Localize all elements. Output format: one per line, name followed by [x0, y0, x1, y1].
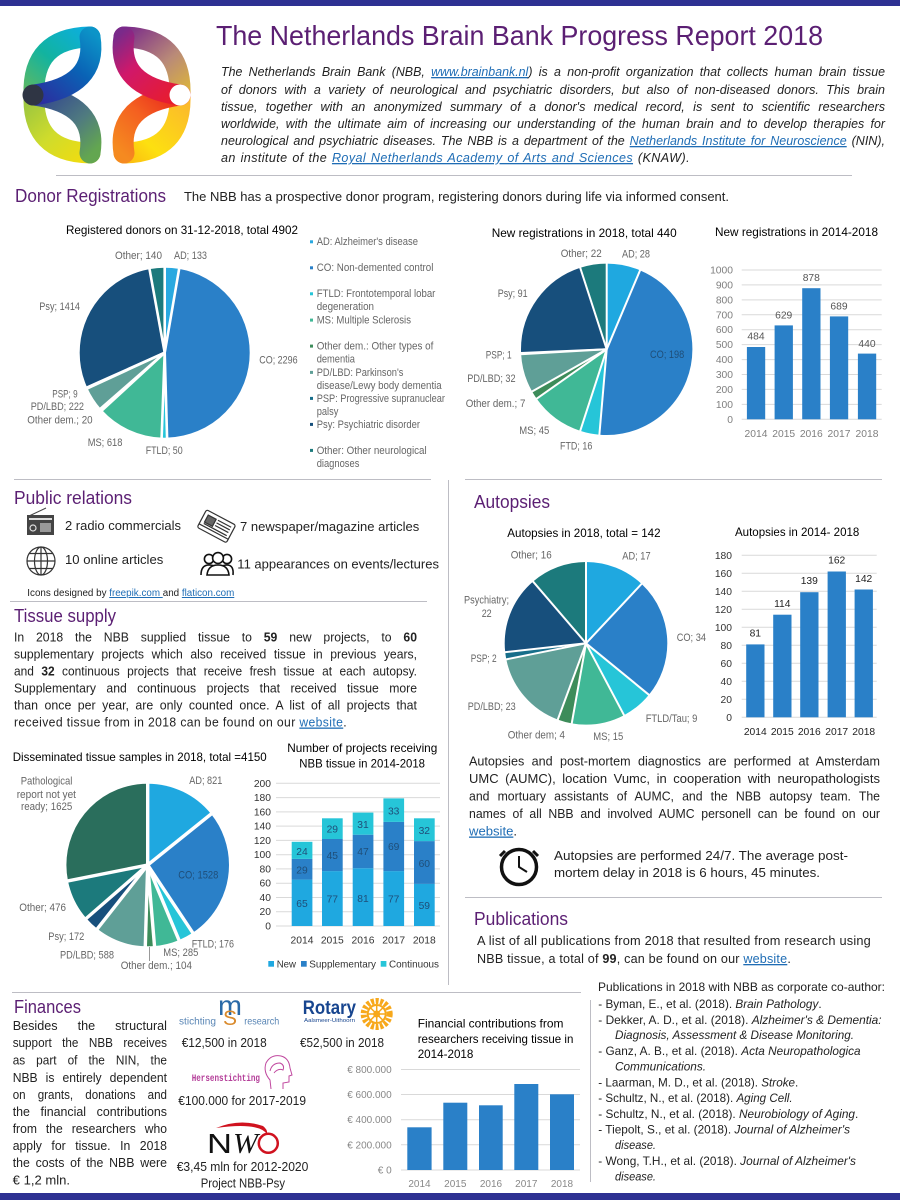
panel: corporate co-author publications list: Publications in 2018 with NBB as corporate co-author: [598, 980, 885, 994]
pie data labels: PSP; 9 [52, 388, 78, 400]
finances paragraph: the financial contributions [13, 1104, 167, 1119]
panel: new registrations bar chart [710, 225, 882, 440]
panel: corporate co-author publications list: Diagnosis, Assessment & Disease Monitoring. [615, 1028, 854, 1042]
icon: people [201, 553, 233, 575]
pie data labels [466, 248, 684, 452]
legend: diagnosis abbreviations: FTLD: Frontotemporal lobar [317, 288, 436, 300]
tissue supply paragraph: In 2018 the NBB supplied tissue to 59 new projects, to 60 [14, 630, 417, 644]
logo: Hersenstichting: Hersenstichting [192, 1073, 260, 1085]
pie data labels: Other dem.; 20 [27, 414, 93, 426]
pie data labels: Other dem.; 7 [466, 398, 525, 410]
panel: corporate co-author publications list [598, 980, 885, 1184]
bar value labels: 484 [747, 332, 765, 342]
bar value labels [747, 273, 876, 350]
tissue supply paragraph: and 32 continuous projects that receive fresh tissue at each autopsy. [14, 664, 417, 678]
pie data labels: AD; 821 [189, 775, 222, 787]
funding: Rotary: €52,500 in 2018 [300, 1036, 384, 1050]
pie chart [122, 310, 207, 395]
bar value labels: 31 [357, 820, 369, 831]
pie chart [107, 824, 188, 906]
y axis labels: € 200.000 [347, 1140, 392, 1151]
bars [746, 572, 873, 717]
bar value labels [296, 806, 430, 912]
chart title: Autopsies in 2014- 2018 [735, 525, 860, 539]
pie data labels: PD/LBD; 222 [31, 401, 84, 413]
chart title [418, 1016, 573, 1061]
x axis labels: 2017 [515, 1179, 538, 1190]
bar value labels: 142 [855, 574, 873, 585]
y axis labels: 60 [260, 879, 271, 890]
x axis labels: 2017 [828, 429, 851, 440]
tissue supply paragraph: Supplementary and continuous projects that received tissue more [14, 680, 417, 696]
funding: NWO: €3,45 mln for 2012-2020 [177, 1160, 308, 1174]
legend: diagnosis abbreviations: dementia [317, 354, 356, 366]
autopsies paragraph: UMC (AUMC), location Vumc, in cooperation with neuropathologists [469, 771, 880, 786]
icon: clock [500, 850, 538, 884]
pie data labels: PD/LBD; 23 [468, 701, 516, 713]
pie data labels: Psy; 172 [48, 931, 84, 943]
bottom bar [0, 1193, 900, 1200]
autopsy delay note [554, 848, 848, 880]
logo: Rotary: Rotary [303, 998, 356, 1019]
y axis labels: 180 [254, 793, 271, 804]
bar value labels: 81 [357, 894, 369, 905]
y axis labels: 20 [260, 907, 271, 918]
bar value labels: 29 [296, 866, 308, 876]
pie data labels: AD; 28 [622, 248, 650, 260]
panel: publications [474, 909, 871, 966]
pie data labels: FTLD; 176 [192, 938, 234, 950]
finances paragraph: support the NBB receives [13, 1035, 167, 1050]
pie data labels: MS; 285 [163, 947, 198, 959]
pie data labels: Other; 22 [561, 248, 602, 260]
x axis labels: 2015 [444, 1179, 467, 1190]
top bar [0, 0, 900, 6]
x axis labels [291, 936, 436, 946]
y axis labels [347, 1065, 392, 1176]
pie data labels: Pathological [21, 776, 72, 788]
pie data labels: Other dem; 4 [508, 730, 565, 742]
legend: diagnosis abbreviations: PD/LBD: Parkinson's [317, 367, 404, 379]
donor program sentence: The NBB has a prospective donor program, registering donors during life via informed consent. [184, 189, 729, 204]
chart legend: New [277, 960, 297, 971]
autopsies paragraph [468, 754, 881, 838]
intro text: worldwide, with the ultimate aim of increasing our understanding of the human brain and to develop therapies for [221, 116, 886, 131]
panel: corporate co-author publications list: - Ganz, A. B., et al. (2018). Acta Neuropathologica [598, 1044, 861, 1058]
y axis labels: 180 [715, 551, 732, 562]
chart title [287, 741, 437, 770]
tissue supply paragraph: received tissue from in 2018 can be found on our website. [14, 714, 347, 730]
bars [747, 288, 876, 419]
x axis labels: 2016 [480, 1179, 503, 1190]
x axis labels: 2018 [852, 727, 875, 738]
x axis labels: 2014 [291, 936, 314, 946]
intro text: tissue, together with an anonymized summary of a donor's medical record, is sent to scientific researchers [221, 99, 885, 114]
autopsy delay note: Autopsies are performed 24/7. The average post- [554, 848, 848, 863]
pie data labels [17, 775, 234, 972]
pie data labels: report not yet [17, 789, 76, 801]
bar value labels: 114 [774, 599, 791, 610]
y axis labels [254, 779, 271, 932]
tissue supply paragraph: supplementary projects which also received tissue in previous years, [14, 646, 417, 662]
y axis labels: 80 [721, 641, 732, 652]
bar value labels: 45 [327, 851, 338, 862]
pie chart [545, 603, 627, 684]
pie data labels: PSP; 1 [486, 350, 512, 362]
panel: corporate co-author publications list: - Byman, E., et al. (2018). Brain Pathology. [598, 997, 822, 1011]
autopsies paragraph: and mortuary assistants of AUMC, and the NBB autopsy team. The [469, 788, 880, 804]
bar value labels: 77 [388, 894, 400, 906]
y axis labels: 200 [716, 385, 733, 396]
publications text [477, 933, 871, 966]
panel: corporate co-author publications list: - Laarman, M. D., et al. (2018). Stroke. [598, 1075, 798, 1089]
pie data labels: CO; 2296 [259, 354, 298, 366]
intro text: of donors with a variety of neurological and psychiatric disorders, but also of non-diseased donors. This brain [221, 82, 885, 97]
y axis labels: 200 [254, 779, 271, 790]
chart legend: Supplementary [309, 960, 377, 971]
x axis labels: 2014 [408, 1179, 431, 1190]
x axis labels: 2014 [744, 727, 767, 738]
pie chart [564, 306, 650, 392]
y axis labels: 100 [254, 850, 271, 861]
finances paragraph: Besides the structural [13, 1018, 167, 1033]
y axis labels: 0 [727, 415, 733, 426]
y axis labels: 900 [716, 280, 733, 291]
autopsies paragraph: Autopsies and post-mortem diagnostics are performed at Amsterdam [469, 754, 880, 768]
legend: diagnosis abbreviations: AD: Alzheimer's disease [317, 236, 418, 248]
chart title: Financial contributions from [418, 1016, 563, 1030]
intro text: neurological and psychiatric diseases. The NBB is a department of the Netherlands Institute for Neuroscience (NIN), [221, 133, 885, 148]
chart title: Number of projects receiving [287, 741, 437, 755]
y axis labels: 800 [716, 295, 733, 306]
pie data labels: CO; 198 [650, 349, 684, 361]
bar value labels: 33 [388, 806, 400, 818]
autopsies paragraph: website. [468, 824, 517, 838]
y axis labels: 40 [260, 893, 271, 904]
x axis labels: 2018 [856, 429, 879, 440]
y axis labels: 1000 [710, 266, 733, 276]
pie data labels: PSP; 2 [471, 653, 497, 665]
pie data labels: Psy; 1414 [39, 301, 80, 313]
x axis labels: 2015 [772, 429, 795, 440]
finances paragraph: on grants, donations and [13, 1087, 167, 1102]
chart legend: Continuous [389, 960, 439, 971]
logo: stichting MS research: stichting [179, 1016, 216, 1028]
chart title: Disseminated tissue samples in 2018, total =4150 [13, 750, 267, 764]
y axis labels: 20 [721, 695, 732, 706]
logo: Rotary: Aalsmeer-Uithoorn [304, 1018, 355, 1024]
bar value labels: 65 [296, 899, 308, 910]
y axis labels: € 600.000 [347, 1090, 392, 1101]
pie data labels: Other dem.; 104 [121, 960, 192, 972]
y axis labels: 160 [715, 569, 732, 580]
pie data labels [27, 250, 298, 457]
bars [407, 1084, 574, 1170]
bar value labels: 162 [828, 556, 846, 566]
pie data labels: Other; 16 [511, 550, 552, 562]
legend: diagnosis abbreviations: diagnoses [317, 458, 360, 470]
x axis labels: 2015 [321, 936, 344, 946]
pie data labels: MS; 45 [519, 425, 549, 437]
newspaper text: 7 newspaper/magazine articles [240, 519, 420, 534]
y axis labels: 700 [716, 310, 733, 321]
heading: Public relations [14, 488, 132, 508]
pie data labels: ready; 1625 [21, 801, 72, 813]
bar value labels [750, 556, 873, 640]
finances paragraph: the costs of the NBB were [13, 1155, 167, 1170]
heading: Finances [14, 997, 81, 1017]
x axis labels: 2018 [551, 1179, 574, 1190]
bar value labels: 69 [388, 842, 400, 853]
autopsies paragraph: names of all NBB and involved AUMC personell can be found on our [469, 806, 881, 821]
logo: Hersenstichting [192, 1056, 292, 1089]
panel: public relations [14, 488, 439, 599]
pie data labels: Psychiatry; [464, 594, 509, 606]
legend: diagnosis abbreviations: Other: Other neurological [317, 445, 427, 457]
logo: stichting MS research: m [218, 990, 242, 1021]
funding: NWO: Project NBB-Psy [201, 1177, 286, 1191]
pie data labels: PD/LBD; 588 [60, 950, 114, 962]
y axis labels: 0 [265, 922, 271, 932]
panel: disseminated tissue pie [13, 750, 267, 972]
y axis labels: 400 [716, 355, 733, 366]
y axis labels [715, 551, 732, 724]
heading: Donor Registrations: Donor Registrations [15, 186, 166, 206]
bar value labels: 81 [750, 628, 761, 640]
chart title: autopsies pie: Autopsies in 2018, total = 142 [507, 526, 661, 540]
pie data labels: CO; 1528 [178, 870, 218, 882]
logo: Netherlands Brain Bank [22, 37, 190, 153]
logo: stichting MS research: S [223, 1007, 237, 1030]
panel: projects stacked bar chart [254, 741, 440, 971]
x axis labels: 2017 [825, 727, 848, 738]
finances paragraph: from the researchers who [13, 1121, 167, 1136]
tissue supply paragraph: than once per year, are only counted once. A list of all projects that [14, 698, 417, 712]
radio text: 2 radio commercials [65, 518, 181, 533]
y axis labels: 120 [254, 836, 271, 847]
intro text: an institute of the Royal Netherlands Academy of Arts and Sciences (KNAW). [221, 150, 690, 165]
pie data labels: MS; 15 [593, 731, 623, 743]
x axis labels: 2016 [800, 429, 823, 440]
legend: diagnosis abbreviations [310, 236, 445, 470]
x axis labels: 2015 [771, 727, 794, 738]
pie data labels: FTD; 16 [560, 440, 592, 452]
logo: NWO: N [207, 1128, 232, 1159]
legend: diagnosis abbreviations: Psy: Psychiatric disorder [317, 419, 420, 431]
bar value labels: 32 [419, 826, 430, 837]
panel: autopsies bar chart [715, 525, 877, 738]
pie data labels: MS; 618 [88, 437, 122, 449]
legend: diagnosis abbreviations: Other dem.: Other types of [317, 340, 434, 352]
x axis labels: 2014 [745, 429, 768, 440]
panel: finances [13, 997, 167, 1188]
bar value labels: 47 [357, 847, 369, 858]
pie data labels [464, 550, 706, 743]
chart title: researchers receiving tissue in [418, 1032, 573, 1046]
bar value labels: 60 [419, 859, 430, 870]
y axis labels: 100 [715, 623, 732, 634]
icon: radio [27, 508, 54, 535]
funding: NWO [177, 1160, 308, 1191]
intro text: The Netherlands Brain Bank (NBB, www.brainbank.nl) is a non-profit organization that collects human brain tissue [221, 64, 885, 79]
y axis labels: € 0 [378, 1166, 392, 1176]
pie data labels: Psy; 91 [498, 288, 528, 300]
finances paragraph: apply for tissue. In 2018 [13, 1138, 167, 1153]
y axis labels: € 400.000 [347, 1115, 392, 1126]
pie data labels: PD/LBD; 32 [467, 373, 516, 385]
panel: corporate co-author publications list: - Schultz, N., et al. (2018). Neurobiology of Aging. [598, 1107, 858, 1121]
bar value labels: 77 [327, 894, 338, 906]
panel: tissue supply [14, 606, 417, 730]
y axis labels: 140 [254, 822, 271, 833]
pie data labels: AD; 17 [622, 550, 651, 562]
autopsy delay note: mortem delay in 2018 is 6 hours, 45 minutes. [554, 865, 820, 880]
y axis labels [710, 266, 733, 426]
x axis labels [745, 429, 879, 440]
pie data labels: 22 [482, 608, 492, 620]
x axis labels: 2018 [413, 936, 436, 946]
legend: diagnosis abbreviations: PSP: Progressive supranuclear [317, 393, 445, 405]
y axis labels: 140 [715, 587, 732, 598]
publications text: NBB tissue, a total of 99, can be found on our website. [477, 951, 791, 966]
legend: diagnosis abbreviations: palsy [317, 406, 339, 418]
heading: Tissue supply [14, 606, 116, 626]
legend: diagnosis abbreviations: CO: Non-demented control [317, 262, 433, 274]
x axis labels [744, 727, 875, 738]
bar value labels: 139 [801, 576, 818, 587]
finances paragraph [13, 1018, 167, 1188]
x axis labels [408, 1179, 574, 1190]
icon: globe [27, 547, 55, 575]
bar value labels: 440 [858, 339, 876, 350]
pie data labels: Other; 476 [19, 902, 66, 914]
y axis labels: 120 [715, 605, 732, 616]
logo: NWO: W [233, 1129, 261, 1160]
bar value labels: 24 [296, 847, 308, 858]
icon credit: Icons designed by freepik.com and flaticon.com [27, 588, 234, 599]
y axis labels: 60 [721, 659, 732, 670]
panel: corporate co-author publications list: - Tiepolt, S., et al. (2018). Journal of Alzheimer's [598, 1123, 850, 1137]
funding: stichting MS research: €12,500 in 2018 [182, 1036, 267, 1050]
bar value labels: 59 [419, 901, 430, 912]
y axis labels: € 800.000 [347, 1065, 392, 1076]
bar value labels: 689 [830, 302, 848, 312]
panel: financial contributions bar chart [347, 1016, 580, 1190]
pie data labels: AD; 133 [174, 250, 207, 262]
finances paragraph: NBB is entirely dependent [13, 1070, 167, 1085]
x axis labels: 2017 [382, 936, 405, 946]
y axis labels: 160 [254, 807, 271, 818]
panel: corporate co-author publications list: - Wong, T.H., et al. (2018). Journal of Alzheimer's [598, 1154, 856, 1168]
finances paragraph: € 1,2 mln. [13, 1172, 70, 1188]
chart legend [268, 960, 439, 971]
panel: corporate co-author publications list: - Schultz, N., et al. (2018). Aging Cell. [598, 1091, 793, 1105]
y axis labels: 0 [726, 713, 732, 724]
legend: diagnosis abbreviations: MS: Multiple Sclerosis [317, 314, 411, 326]
publications text: A list of all publications from 2018 that resulted from research using [477, 933, 871, 948]
intro text [221, 64, 886, 165]
y axis labels: 600 [716, 325, 733, 336]
events text: 11 appearances on events/lectures [237, 556, 439, 572]
y axis labels: 500 [716, 340, 733, 351]
y axis labels: 80 [260, 864, 271, 875]
chart title: 2014-2018 [418, 1047, 474, 1061]
panel: corporate co-author publications list: - Dekker, A. D., et al. (2018). Alzheimer's & Dementia: [598, 1013, 882, 1027]
heading: Publications [474, 909, 568, 929]
y axis labels: 100 [716, 400, 733, 411]
x axis labels: 2016 [798, 727, 821, 738]
chart title: New registrations in 2014-2018 [715, 225, 878, 239]
y axis labels: 40 [721, 677, 732, 688]
pie data labels: CO; 34 [677, 632, 706, 644]
icon: newspaper [197, 510, 236, 543]
logo: stichting MS research: research [244, 1016, 279, 1028]
logo: stichting MS research [179, 990, 279, 1030]
pie data labels: FTLD/Tau; 9 [646, 713, 697, 725]
panel: corporate co-author publications list: disease. [615, 1170, 656, 1184]
tissue supply paragraph [14, 630, 417, 730]
bar value labels: 629 [775, 310, 793, 322]
finances paragraph: as part of the NIN, the [13, 1052, 167, 1068]
logo: Rotary [303, 998, 390, 1027]
bar value labels: 878 [803, 273, 820, 284]
panel: new registrations pie [466, 226, 684, 452]
logo: NWO [207, 1122, 278, 1160]
online articles text: 10 online articles [65, 552, 164, 567]
panel: registered donors pie [27, 223, 298, 457]
chart title: NBB tissue in 2014-2018 [299, 756, 425, 770]
bar value labels: 29 [327, 824, 338, 836]
legend: diagnosis abbreviations: disease/Lewy body dementia [317, 380, 442, 392]
heading: Autopsies [474, 492, 550, 512]
legend: diagnosis abbreviations: degeneration [317, 301, 374, 313]
panel: corporate co-author publications list: disease. [615, 1138, 656, 1152]
stacked bars [292, 798, 435, 926]
pie data labels: FTLD; 50 [146, 445, 183, 457]
x axis labels: 2016 [352, 936, 375, 946]
panel: autopsies [464, 492, 706, 743]
pie data labels: Other; 140 [115, 250, 162, 262]
y axis labels: 300 [716, 370, 733, 381]
chart title: New registrations in 2018, total 440 [492, 226, 677, 240]
chart title: Registered donors on 31-12-2018, total 4902 [66, 223, 298, 237]
title: The Netherlands Brain Bank Progress Report 2018 [216, 20, 823, 51]
panel: corporate co-author publications list: Communications. [615, 1060, 706, 1074]
funding: Hersenstichting: €100.000 for 2017-2019 [178, 1094, 306, 1108]
